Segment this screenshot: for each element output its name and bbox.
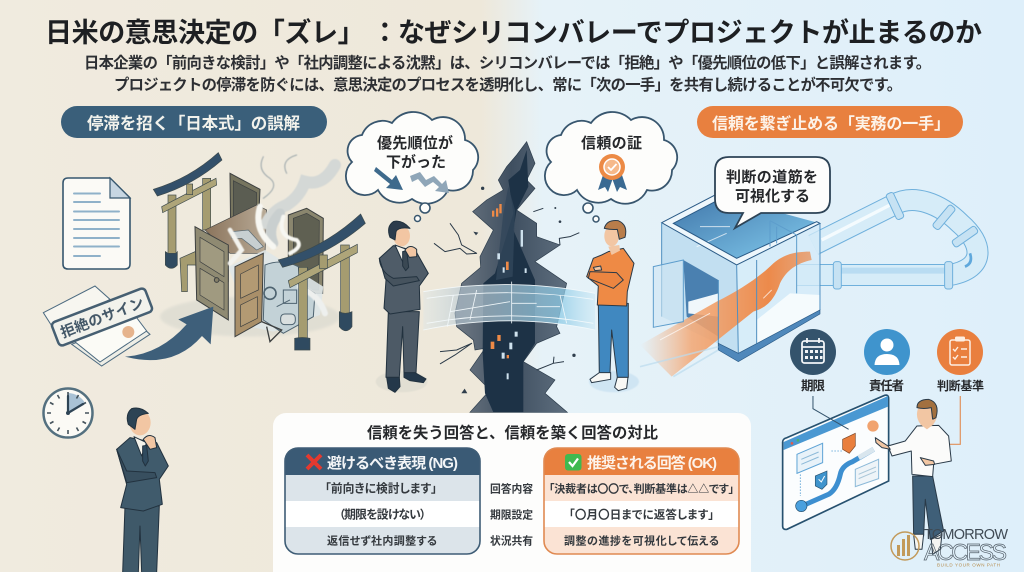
sign of rejection papers: 拒絶のサイン [58,293,146,342]
logo: BUILD YOUR OWN PATH [937,562,1000,568]
heading: left pill: 停滞を招く「日本式」の誤解 [87,114,300,133]
thought cloud: proof of trust [545,112,677,222]
intro text: プロジェクトの停滞を防ぐには、意思決定のプロセスを透明化し、常に「次の一手」を共有し続けることが不可欠です。 [114,76,902,94]
OK column: 調整の進捗を可視化して伝える [564,534,719,548]
logo [891,527,1008,568]
row labels: 回答内容 [490,482,533,496]
comparison panel [273,413,751,572]
thought cloud: priority dropped [346,112,478,222]
NG column [285,448,480,554]
figure: Japanese businessman [376,221,428,392]
row labels: 期限設定 [490,508,533,522]
label: decision criteria: 判断基準 [937,378,984,393]
heading: right pill: 信頼を繋ぎ止める「実務の一手」 [712,114,950,133]
illustration: transparent glass box and pipe [640,192,979,377]
NG column: （期限を設けない） [339,508,426,522]
OK column: 「決裁者は〇〇で、判断基準は△△です」 [549,482,734,496]
icon: clock [44,388,92,438]
row labels: 状況共有 [490,534,533,548]
figure: presenter [875,399,951,554]
label: deadline: 期限 [801,379,825,393]
thought cloud: priority dropped: 優先順位が [377,134,453,152]
central crack [434,142,579,412]
thought cloud: proof of trust: 信頼の証 [581,134,642,152]
illustration: torii gates and stalled machine [153,153,365,350]
icon: award medal [598,154,627,192]
logo: ACCESS [924,539,1007,565]
heading: right pill [697,106,963,138]
icon: document [63,178,130,269]
callout: visualize judgment path: 判断の道筋を [726,168,818,186]
icon: responsible person [864,329,910,375]
intro text [84,54,931,94]
icon: deadline calendar [790,329,836,375]
row labels [490,482,533,548]
OK column [544,448,739,554]
arrow: into stalled machine [125,307,213,360]
glass bridge across crack [423,282,595,330]
logo: TOMORROW [924,527,1008,543]
OK column: 「〇月〇日までに返答します」 [569,508,714,522]
label: responsible person: 責任者 [869,378,904,393]
callout: visualize judgment path [715,157,830,228]
NG column: 返信せず社内調整する [327,534,437,548]
callout: visualize judgment path: 可視化する [735,188,810,205]
OK column: 推奨される回答 (OK) [587,454,717,472]
pipe [797,192,979,289]
presentation screen [783,395,960,529]
sign of rejection papers [43,286,153,366]
figure: American engineer arms crossed [587,220,639,392]
thought cloud: priority dropped: 下がった [386,153,446,171]
NG column: 「前向きに検討します」 [325,482,437,496]
NG column: 避けるべき表現 (NG) [327,454,458,472]
intro text: 日本企業の「前向きな検討」や「社内調整による沈黙」は、シリコンバレーでは「拒絶」や「優先順位の低下」と誤解されます。 [84,54,931,72]
figure: thinking businessman (lower) [117,408,168,572]
icon: decision criteria clipboard [937,329,983,375]
panel title: 信頼を失う回答と、信頼を築く回答の対比 [367,424,658,442]
heading: left pill [61,106,327,138]
title: 日米の意思決定の「ズレ」 ：なぜシリコンバレーでプロジェクトが止まるのか [45,17,982,48]
